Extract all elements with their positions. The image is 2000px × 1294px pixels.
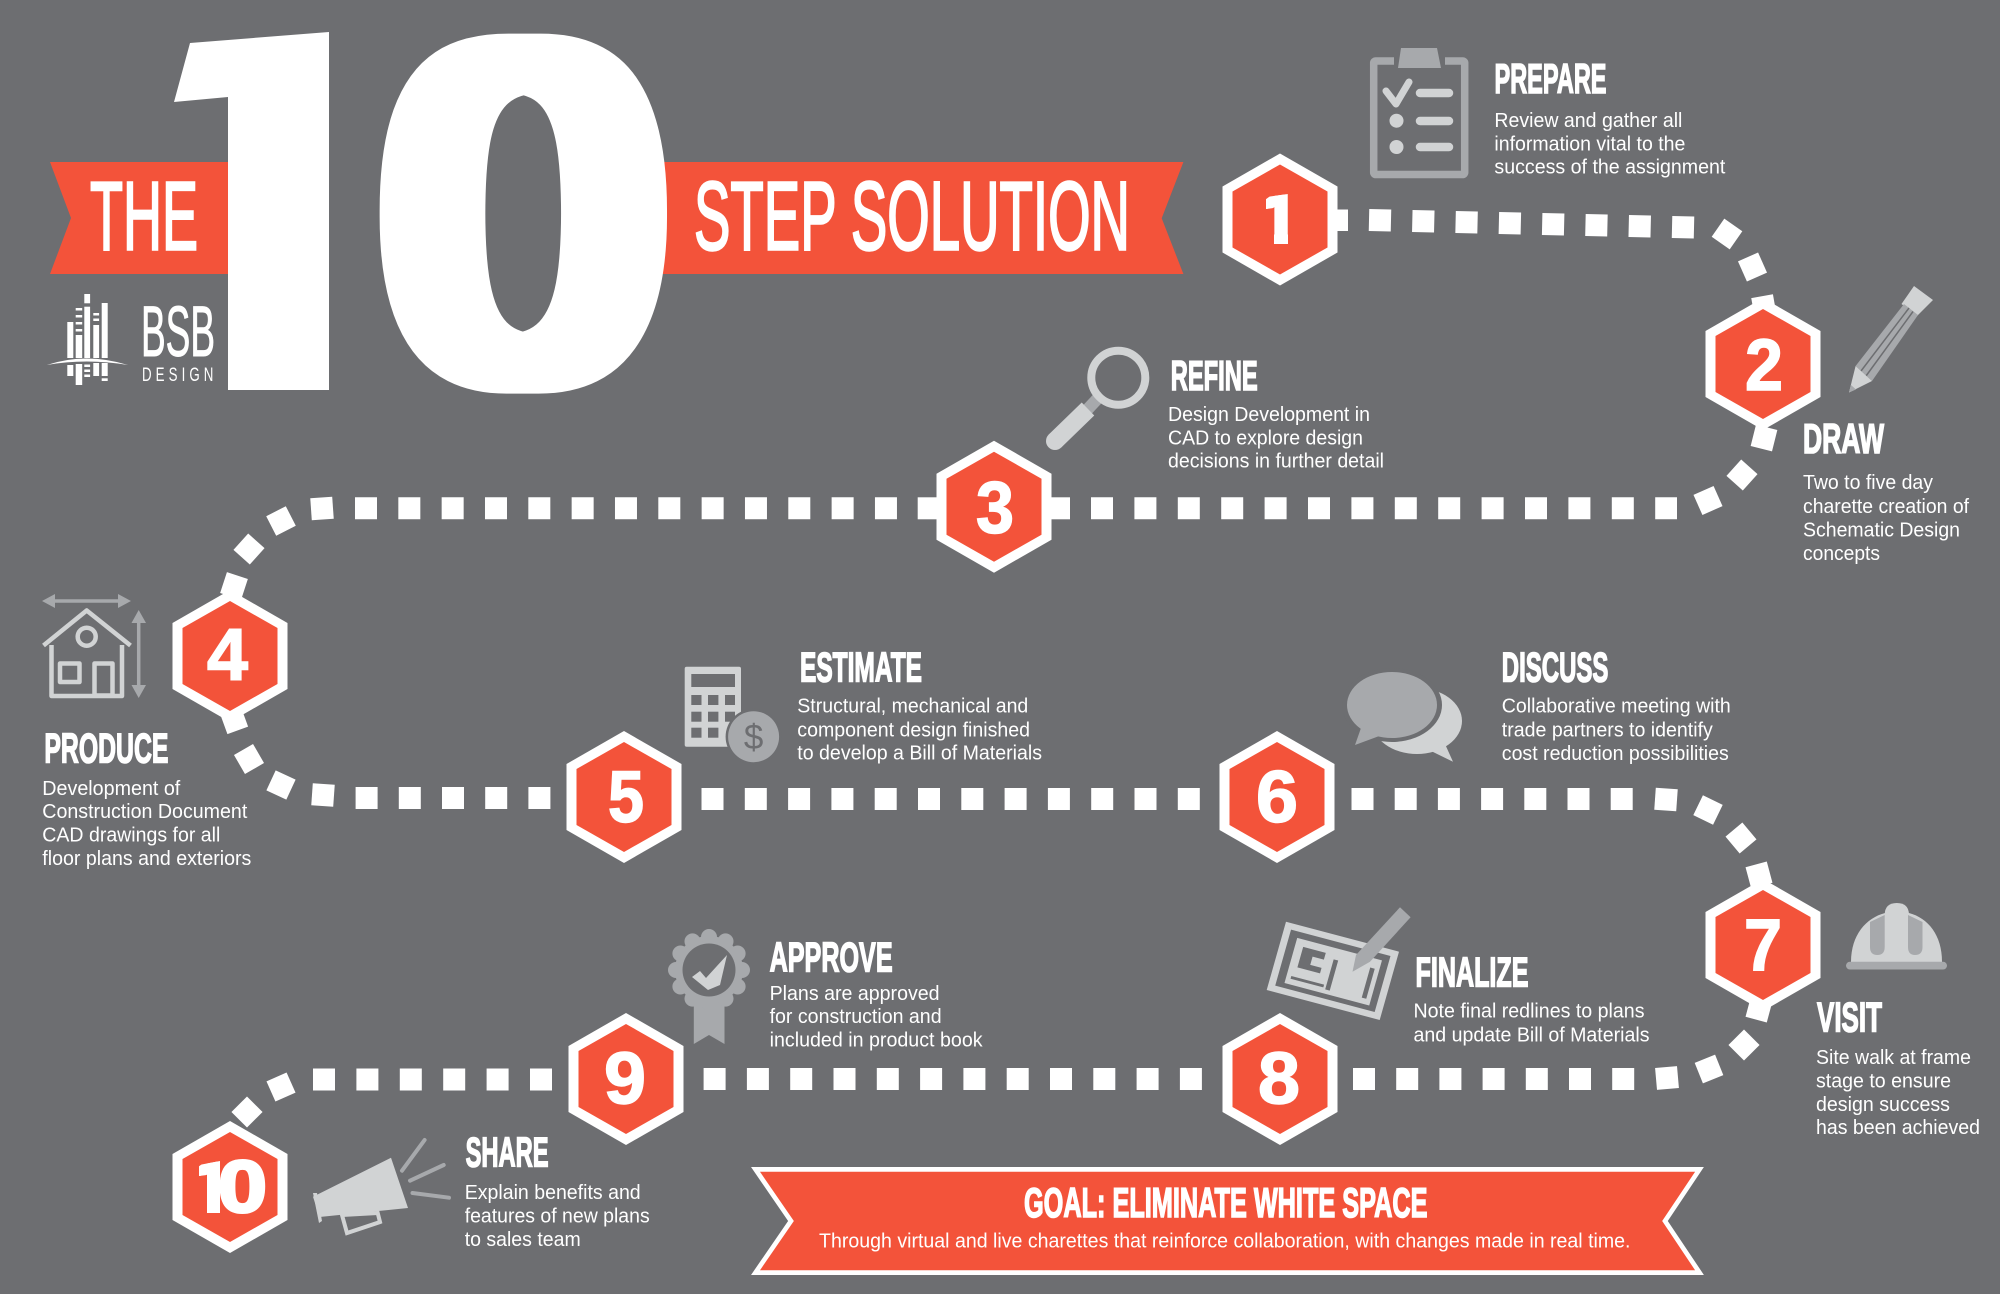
hexagon badge 7 (1706, 879, 1820, 1011)
description (1168, 403, 1384, 473)
description (770, 982, 983, 1052)
hexagon badge 9 (568, 1013, 684, 1145)
logo text: DESIGN: DESIGN (142, 365, 213, 386)
logo: BSB Design (47, 293, 215, 386)
description: has been achieved (1816, 1116, 1980, 1139)
heading: FINALIZE: FINALIZE (1416, 948, 1528, 996)
banner ribbon (756, 1169, 1700, 1273)
hexagon badge 3 (936, 441, 1052, 573)
banner heading: GOAL: ELIMINATE WHITE SPACE (1024, 1179, 1428, 1226)
hexagon badge 4 (172, 590, 288, 722)
hexagon badge 1 (1222, 154, 1338, 286)
icon: calculator and coin: $ (744, 718, 763, 757)
logo text: BSB: BSB (141, 293, 215, 372)
description: component design finished (797, 718, 1030, 741)
description: Review and gather all (1494, 109, 1682, 132)
description: design success (1816, 1093, 1950, 1116)
step 6: discuss (1220, 644, 1731, 863)
description: for construction and (770, 1005, 942, 1028)
hexagon badge 8 (1222, 1013, 1338, 1145)
description (1816, 1046, 1980, 1139)
description: CAD drawings for all (42, 824, 220, 847)
icon: house with dimensions (42, 594, 146, 698)
title word: THE: THE (90, 162, 198, 270)
description (1494, 109, 1726, 178)
description: charette creation of (1803, 495, 1969, 518)
icon: megaphone (313, 1140, 449, 1233)
description: stage to ensure (1816, 1070, 1951, 1092)
description: to sales team (465, 1228, 581, 1251)
heading: APPROVE: APPROVE (770, 934, 893, 980)
description: CAD to explore design (1168, 426, 1363, 450)
heading: VISIT: VISIT (1817, 994, 1882, 1040)
icon: calculator and coin (685, 667, 782, 765)
dotted path connecting the steps (220, 210, 1777, 1128)
step 1: prepare (1222, 48, 1726, 286)
icon: floor plan and pencil (1267, 907, 1411, 1020)
big number 10 (174, 32, 667, 394)
icon: hard hat (1846, 903, 1947, 970)
hexagon badge 3: 3 (976, 468, 1014, 549)
step 4: produce (42, 590, 288, 870)
hexagon badge 6: 6 (1256, 757, 1298, 838)
description: Development of (42, 777, 181, 800)
description (1414, 1000, 1650, 1047)
heading: PRODUCE: PRODUCE (44, 724, 168, 772)
hexagon badge 10 (172, 1121, 288, 1253)
description: decisions in further detail (1168, 450, 1384, 473)
description (1502, 695, 1731, 765)
description: trade partners to identify (1502, 719, 1714, 742)
description: Explain benefits and (465, 1181, 641, 1204)
icon: clipboard (1374, 48, 1465, 174)
hexagon badge 6 (1220, 731, 1334, 863)
icon: magnifying glass (1046, 351, 1145, 450)
description: Site walk at frame (1816, 1046, 1971, 1069)
icon: award badge (668, 929, 750, 1044)
description (465, 1181, 650, 1251)
hexagon badge 5: 5 (608, 757, 644, 838)
description: success of the assignment (1494, 156, 1726, 178)
description: Collaborative meeting with (1502, 695, 1731, 718)
description (1803, 471, 1969, 565)
description: Schematic Design (1803, 518, 1960, 542)
icon: speech bubbles (1342, 668, 1462, 762)
heading: SHARE: SHARE (466, 1128, 549, 1176)
banner text: Through virtual and live charettes that reinforce collaboration, with changes made in real time. (819, 1229, 1630, 1252)
hexagon badge 8: 8 (1258, 1038, 1300, 1120)
description: information vital to the (1494, 132, 1685, 156)
step 10: share (172, 1121, 650, 1253)
heading: DISCUSS: DISCUSS (1502, 644, 1608, 690)
hexagon badge 2: 2 (1745, 325, 1783, 406)
description: Structural, mechanical and (797, 695, 1028, 718)
step 9: approve (568, 929, 983, 1145)
description: included in product book (770, 1029, 983, 1052)
step 3: refine (936, 351, 1384, 573)
hexagon badge 4: 4 (207, 615, 248, 696)
description: cost reduction possibilities (1502, 742, 1729, 765)
hexagon badge 7: 7 (1744, 905, 1782, 986)
title ribbon (50, 162, 1183, 274)
description: Note final redlines to plans (1414, 1000, 1644, 1023)
description: to develop a Bill of Materials (797, 741, 1042, 764)
description: concepts (1803, 542, 1880, 565)
description: Two to five day (1803, 471, 1934, 494)
heading: PREPARE: PREPARE (1494, 55, 1606, 102)
step 7: visit (1706, 879, 1980, 1139)
description: floor plans and exteriors (42, 847, 251, 870)
description: and update Bill of Materials (1414, 1024, 1650, 1047)
step 8: finalize (1222, 907, 1650, 1145)
description: features of new plans (465, 1205, 650, 1228)
goal banner (756, 1169, 1700, 1273)
hexagon badge 9: 9 (604, 1038, 646, 1120)
description: Construction Document (42, 800, 248, 823)
hexagon badge 2 (1706, 298, 1820, 430)
icon: skyline mark (47, 294, 128, 385)
description (42, 777, 251, 870)
heading: ESTIMATE: ESTIMATE (800, 644, 922, 690)
heading: REFINE: REFINE (1171, 352, 1258, 399)
hexagon badge 10: 0 (218, 1147, 267, 1228)
hexagon badge 1: 1 (1262, 180, 1298, 260)
heading: DRAW: DRAW (1803, 415, 1884, 462)
description: Design Development in (1168, 403, 1370, 426)
description: Plans are approved (770, 982, 940, 1005)
title words: STEP SOLUTION: STEP SOLUTION (694, 162, 1130, 270)
description (797, 695, 1042, 764)
icon: pencil (1849, 286, 1933, 392)
step 5: estimate (566, 644, 1042, 863)
hexagon badge 5 (566, 731, 682, 863)
hexagon badge 10: 1 (194, 1147, 230, 1228)
step 2: draw (1706, 286, 1969, 565)
